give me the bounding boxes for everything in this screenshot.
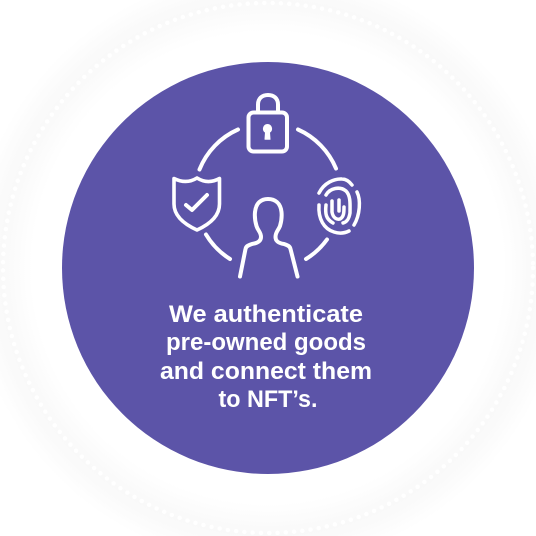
purple circle	[62, 62, 474, 474]
caption line 1: We authenticate	[169, 301, 363, 328]
caption line 3: and connect them	[160, 358, 372, 385]
caption text	[160, 301, 372, 413]
icon group	[174, 95, 359, 276]
icon: padlock	[248, 95, 287, 152]
icon: shield with check	[174, 178, 220, 230]
icon: fingerprint	[319, 179, 359, 233]
caption line 4: to NFT’s.	[218, 386, 318, 413]
icon: person silhouette	[240, 199, 298, 276]
caption line 2: pre-owned goods	[166, 329, 366, 356]
dashed ring arcs	[200, 130, 336, 259]
